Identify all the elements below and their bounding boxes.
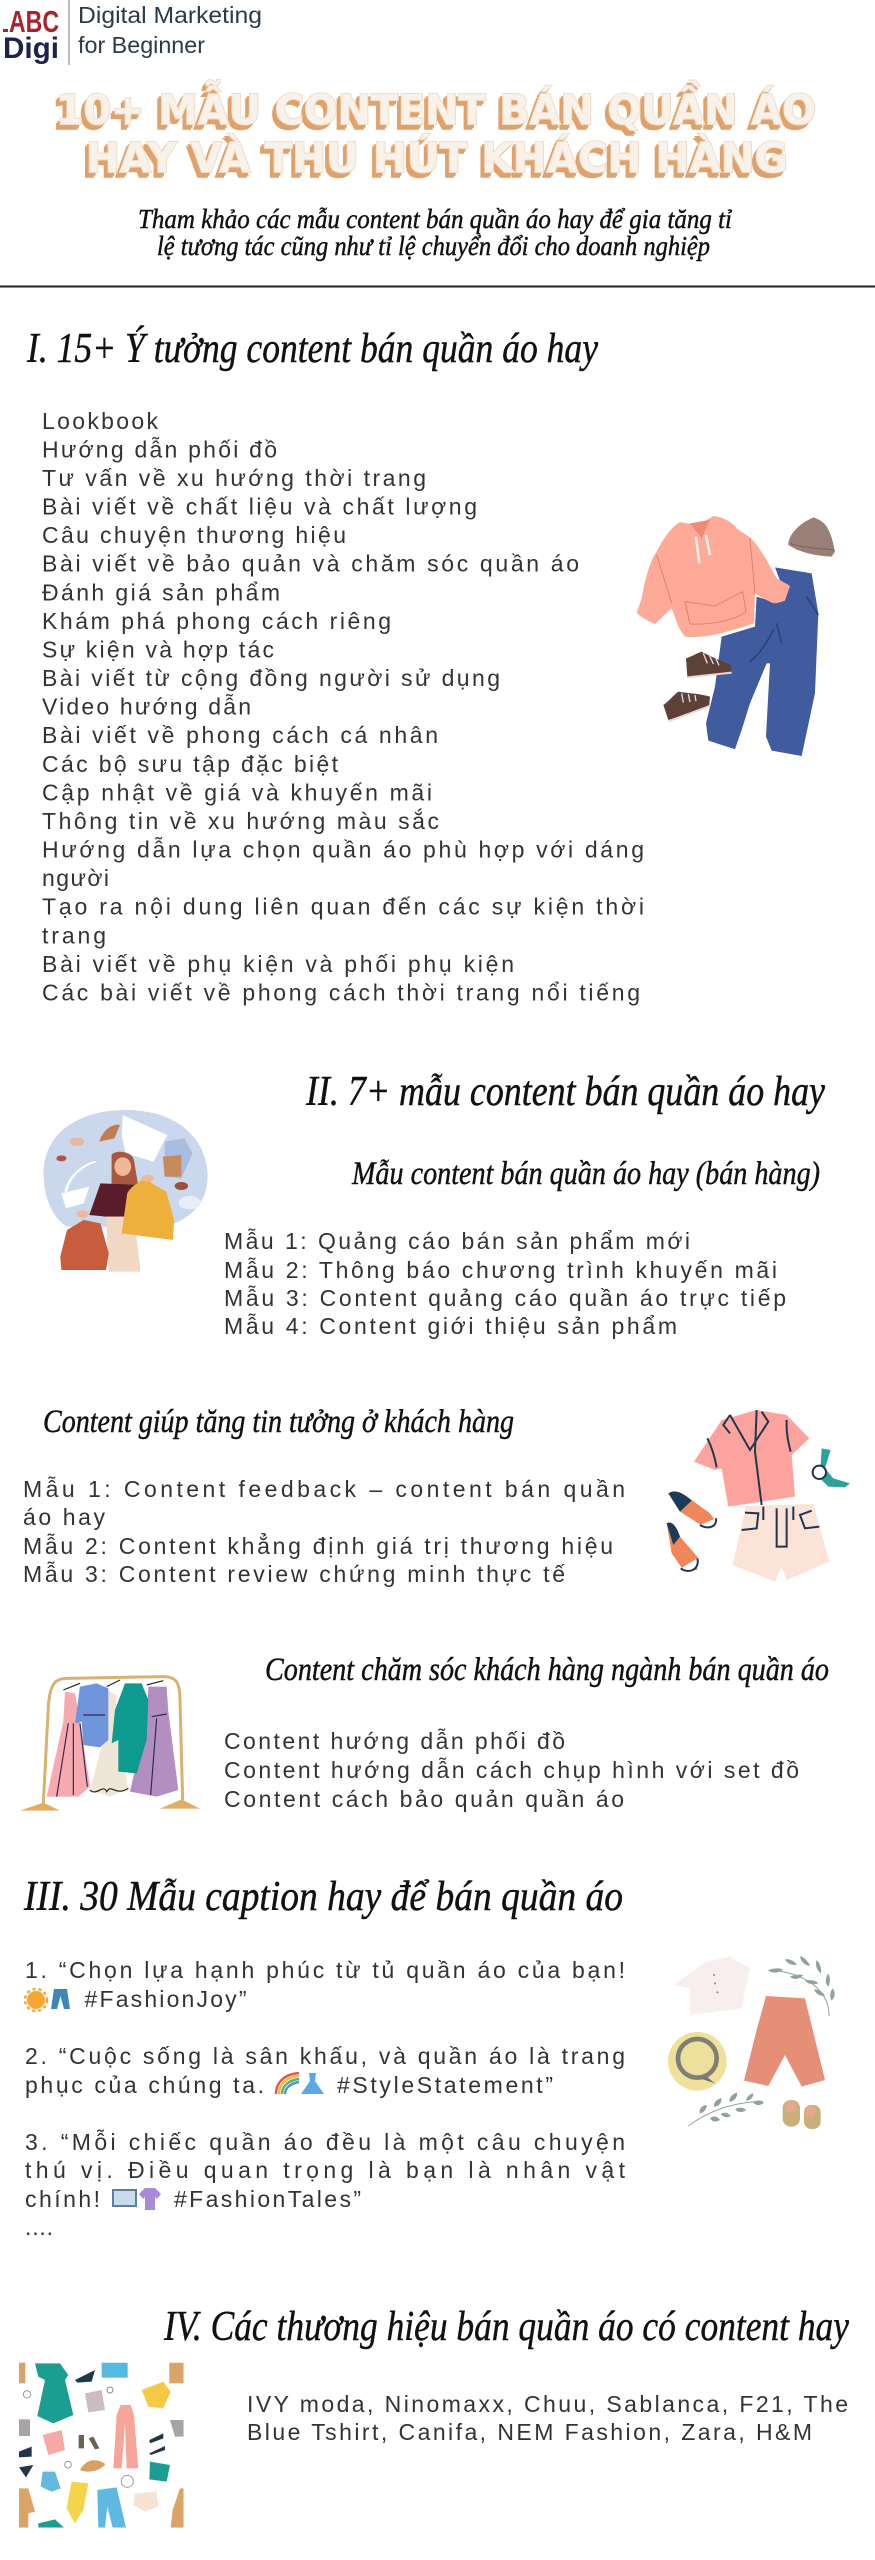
title: 10+ MẪU CONTENT BÁN QUẦN ÁO (56, 80, 816, 134)
text block: list of 15+ content ideas: Khám phá phong cách riêng (42, 608, 391, 634)
text block: list of 15+ content ideas: Các bài viết về phong cách thời trang nổi tiếng (42, 980, 640, 1006)
text block: customer care templates: Content hướng dẫn cách chụp hình với set đồ (224, 1757, 799, 1783)
text block: brand names: IVY moda, Ninomaxx, Chuu, Sablanca, F21, The (247, 2391, 848, 2417)
text block: sales templates: Mẫu 2: Thông báo chương trình khuyến mãi (224, 1257, 777, 1283)
text block: sales templates (224, 1228, 786, 1339)
text block: trust templates (23, 1476, 625, 1587)
text block: caption examples: chính! (25, 2186, 100, 2212)
text block: sales templates: Mẫu 4: Content giới thiệu sản phẩm (224, 1313, 677, 1339)
text block: list of 15+ content ideas: Câu chuyện thương hiệu (42, 522, 346, 548)
text block: list of 15+ content ideas: người (42, 865, 109, 891)
text block: list of 15+ content ideas: Bài viết từ cộng đồng người sử dụng (42, 665, 500, 691)
text block: caption examples: #FashionJoy” (84, 1986, 246, 2012)
text block: caption examples: #FashionTales” (174, 2186, 361, 2212)
logo: ABC Digi: ABC (9, 4, 59, 39)
illustration: shirt, shorts, watch and sneakers (667, 1410, 850, 1582)
illustration: watercolor shirt, trousers, hat and sandals (668, 1956, 835, 2129)
text block: list of 15+ content ideas: Bài viết về phụ kiện và phối phụ kiện (42, 951, 514, 977)
text block: customer care templates: Content hướng dẫn phối đồ (224, 1728, 565, 1754)
text block: caption examples: 2. “Cuộc sống là sân khấu, và quần áo là trang (25, 2043, 625, 2069)
text block: list of 15+ content ideas: Thông tin về xu hướng màu sắc (42, 808, 439, 834)
logo: ABC Digi (3, 0, 262, 65)
text block: caption examples: #StyleStatement” (337, 2072, 553, 2098)
title: HAY VÀ THU HÚT KHÁCH HÀNG (82, 139, 784, 187)
text block: trust templates: Mẫu 3: Content review chứng minh thực tế (23, 1561, 565, 1587)
heading: section III: III. 30 Mẫu caption hay để bán quần áo (23, 1874, 623, 1920)
text block: list of 15+ content ideas: Bài viết về chất liệu và chất lượng (42, 494, 477, 520)
illustration: woman holding jackets (44, 1110, 208, 1272)
text block: list of 15+ content ideas: Đánh giá sản phẩm (42, 580, 280, 606)
title: HAY VÀ THU HÚT KHÁCH HÀNG (84, 137, 786, 185)
text block: brand names (247, 2391, 848, 2445)
text block: sales templates: Mẫu 3: Content quảng cáo quần áo trực tiếp (224, 1285, 786, 1311)
text block: list of 15+ content ideas: trang (42, 922, 106, 948)
text block: list of 15+ content ideas: Các bộ sưu tập đặc biệt (42, 751, 339, 777)
illustration: clothes rack with dresses (20, 1677, 200, 1811)
logo: ABC Digi: Digital Marketing (78, 2, 262, 28)
text block: caption examples: thú vị. Điều quan trọng là bạn là nhân vật (25, 2157, 626, 2183)
title: 10+ MẪU CONTENT BÁN QUẦN ÁO (52, 85, 812, 139)
text block: list of 15+ content ideas: Video hướng dẫn (42, 694, 251, 720)
text block: trust templates: áo hay (23, 1504, 106, 1530)
text block: caption examples: .... (25, 2214, 53, 2240)
text block: list of 15+ content ideas: Hướng dẫn phối đồ (42, 436, 277, 462)
text block: caption examples: 3. “Mỗi chiếc quần áo đều là một câu chuyện (25, 2129, 625, 2155)
icon: jeans (51, 1989, 70, 2009)
subtitle (138, 204, 732, 261)
title (52, 80, 816, 187)
illustration: fashion items pattern (17, 2363, 184, 2528)
icon: dress (301, 2073, 324, 2094)
illustration: hoodie, jeans, beanie and sneakers (637, 516, 835, 756)
logo: ABC Digi: for Beginner (78, 32, 205, 58)
text block: trust templates: Mẫu 1: Content feedback – content bán quần (23, 1476, 625, 1502)
text block: list of 15+ content ideas: Tạo ra nội dung liên quan đến các sự kiện thời (42, 894, 644, 920)
text block: list of 15+ content ideas: Sự kiện và hợp tác (42, 636, 274, 662)
text block: list of 15+ content ideas: Bài viết về phong cách cá nhân (42, 722, 438, 748)
text block: brand names: Blue Tshirt, Canifa, NEM Fashion, Zara, H&M (247, 2419, 812, 2445)
text block: list of 15+ content ideas (42, 408, 644, 1006)
text block: customer care templates: Content cách bảo quản quần áo (224, 1786, 624, 1812)
subtitle: lệ tương tác cũng như tỉ lệ chuyển đổi cho doanh nghiệp (157, 231, 710, 261)
icon: sun (25, 1989, 47, 2011)
text block: caption examples: 1. “Chọn lựa hạnh phúc từ tủ quần áo của bạn! (25, 1957, 625, 1983)
text block: caption examples: phục của chúng ta. (25, 2072, 264, 2098)
logo: ABC Digi: Digi (3, 32, 59, 65)
text block: list of 15+ content ideas: Hướng dẫn lựa chọn quần áo phù hợp với dáng (42, 836, 644, 862)
text block: customer care templates (224, 1728, 799, 1812)
title: HAY VÀ THU HÚT KHÁCH HÀNG (86, 134, 788, 182)
text block: caption examples (25, 1957, 626, 2240)
text block: trust templates: Mẫu 2: Content khẳng định giá trị thương hiệu (23, 1531, 613, 1559)
icon: open book (113, 2190, 136, 2206)
icon: t-shirt (139, 2188, 161, 2210)
text block: sales templates: Mẫu 1: Quảng cáo bán sản phẩm mới (224, 1228, 690, 1254)
subheading: building customer trust: Content giúp tăng tin tưởng ở khách hàng (43, 1404, 514, 1440)
text block: list of 15+ content ideas: Bài viết về bảo quản và chăm sóc quần áo (42, 550, 579, 576)
text block: list of 15+ content ideas: Cập nhật về giá và khuyến mãi (42, 780, 432, 806)
heading: section I: I. 15+ Ý tưởng content bán quần áo hay (26, 325, 598, 372)
icon: rainbow (276, 2073, 299, 2094)
title: 10+ MẪU CONTENT BÁN QUẦN ÁO (54, 83, 814, 137)
text block: list of 15+ content ideas: Tư vấn về xu hướng thời trang (42, 465, 426, 491)
subtitle: Tham khảo các mẫu content bán quần áo hay để gia tăng tỉ (138, 204, 732, 234)
text block: list of 15+ content ideas: Lookbook (42, 408, 158, 434)
